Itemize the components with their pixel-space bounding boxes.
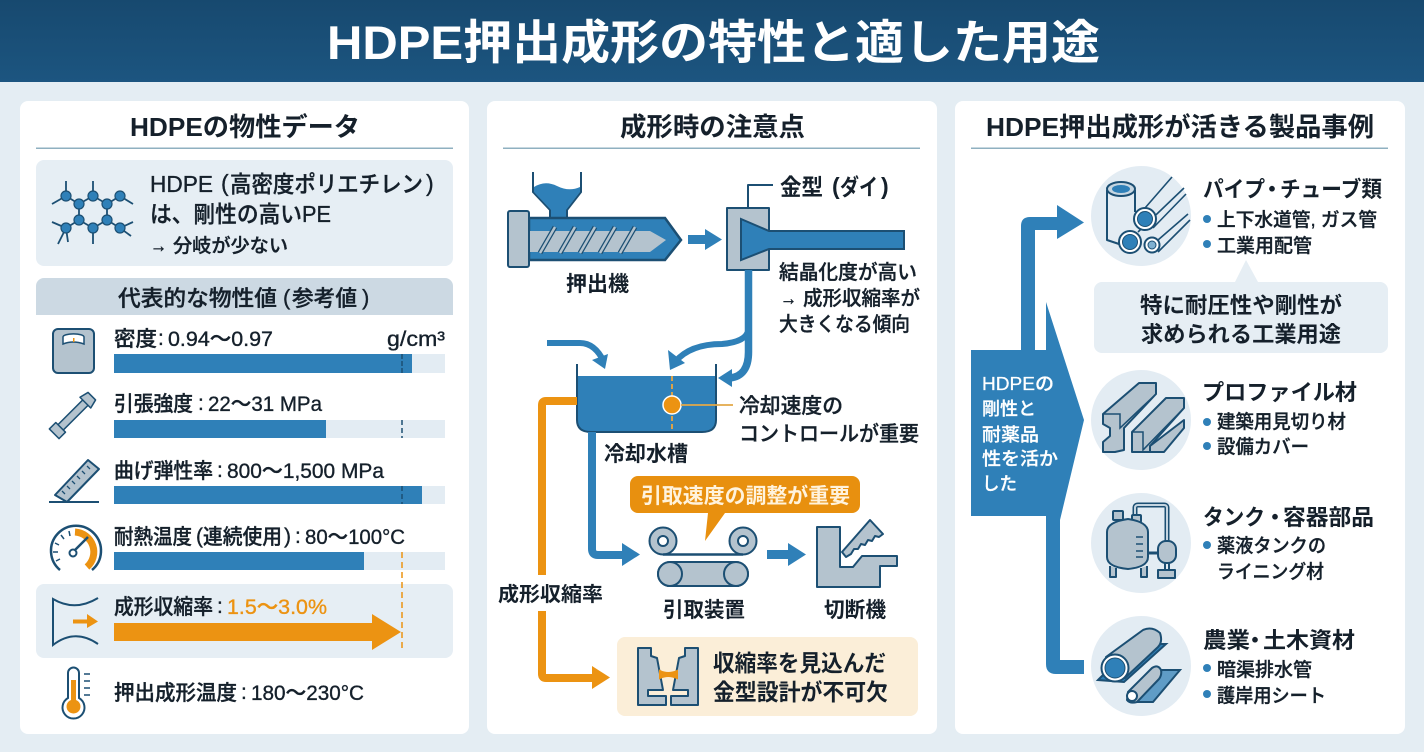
label: puller: 引取装置	[663, 599, 745, 622]
row: flexural modulus: 曲げ弾性率	[114, 460, 213, 483]
icon: rolls and sheet	[1098, 629, 1180, 703]
icon: scale	[53, 329, 94, 373]
heading: cautions: 成形時の注意点	[620, 112, 805, 142]
row: flexural modulus: :	[217, 459, 223, 482]
title: pipes	[1203, 177, 1382, 202]
heading: examples: HDPE押出成形が活きる製品事例	[986, 112, 1374, 142]
note: crystallinity: →	[780, 288, 797, 310]
row: tensile strength	[49, 391, 445, 439]
intro box	[36, 160, 453, 266]
icon: thermometer	[62, 668, 90, 719]
row: heat resistance: 耐熱温度	[114, 526, 192, 549]
label: cutter: 切断機	[824, 599, 886, 622]
label: cooling tank: 冷却水槽	[604, 443, 688, 466]
row: density	[53, 327, 445, 373]
callout: pull speed: 引取速度の調整が重要	[641, 484, 850, 508]
title: agricultural: 土木資材	[1263, 628, 1355, 653]
icon: shrinking part	[53, 598, 98, 645]
heading: properties: HDPEの物性データ	[130, 112, 360, 142]
row: density: g/cm³	[387, 328, 445, 351]
callout: industrial use	[1094, 260, 1388, 353]
icon: tank and pump	[1107, 505, 1176, 578]
icon: gauge	[51, 526, 101, 570]
row: extrusion temperature: :	[241, 681, 247, 704]
row: tensile strength: 引張強度	[114, 393, 193, 416]
intro text: →	[150, 236, 167, 257]
row: extrusion temperature: 押出成形温度	[114, 682, 237, 705]
note: cooling speed	[739, 395, 919, 446]
title banner: HDPE押出成形の特性と適した用途	[327, 16, 1100, 69]
icon: profiles	[1103, 383, 1184, 452]
row: heat resistance	[51, 525, 445, 570]
intro text: は、剛性の高いPE	[150, 201, 331, 227]
row: shrinkage highlighted: :	[217, 595, 223, 618]
label: die: )	[881, 173, 889, 199]
row: heat resistance: (	[196, 525, 203, 548]
row: heat resistance: 連続使用	[203, 526, 282, 549]
extruder	[508, 172, 681, 296]
label: branching text: した	[982, 474, 1017, 494]
label: die: (	[832, 173, 840, 199]
title: agricultural: ・	[1244, 628, 1266, 653]
example: profiles: プロファイル材	[1202, 380, 1357, 405]
example: profiles: 設備カバー	[1217, 436, 1309, 458]
icon: tensile specimen	[49, 391, 97, 439]
note: crystallinity: 成形収縮率が	[803, 287, 920, 310]
example: pipes: 上下水道管, ガス管	[1217, 209, 1377, 231]
row: heat resistance: :	[295, 525, 301, 548]
row: tensile strength: :	[198, 392, 204, 415]
row: shrinkage highlighted: 成形収縮率	[114, 596, 213, 619]
example: agricultural materials	[1091, 616, 1355, 716]
intro text: 分岐が少ない	[173, 235, 288, 257]
label: die: ダイ	[840, 174, 878, 200]
subheading: typical values: )	[362, 285, 369, 310]
example: profiles: 建築用見切り材	[1217, 411, 1346, 433]
row: density: 密度	[114, 328, 157, 351]
note: crystallinity: 大きくなる傾向	[779, 313, 910, 336]
row: extrusion temperature	[62, 668, 364, 719]
cutter	[817, 520, 897, 622]
panel: HDPE properties	[20, 101, 469, 734]
example: pipes: 工業用配管	[1217, 235, 1312, 257]
cooling tank	[577, 364, 733, 466]
label: die: 金型	[780, 174, 823, 200]
callout: mold design: 金型設計が不可欠	[713, 679, 888, 705]
title: tanks: タンク	[1203, 505, 1265, 530]
row: shrinkage highlighted	[36, 584, 453, 658]
example: agricultural materials: 暗渠排水管	[1217, 659, 1312, 681]
example: agricultural materials: 護岸用シート	[1217, 685, 1326, 707]
label: branching text: 性を活か	[982, 449, 1058, 469]
label: branching text: HDPEの	[982, 374, 1054, 394]
example: pipes	[1091, 166, 1382, 266]
label: die	[780, 173, 889, 200]
panel: molding cautions	[487, 101, 937, 734]
title: pipes: パイプ	[1203, 177, 1265, 202]
note: crystallinity	[779, 261, 920, 336]
intro text: )	[426, 170, 434, 196]
subheading: typical values: (	[283, 285, 291, 310]
row: flexural modulus	[49, 459, 445, 504]
arrows: flow to cooling tank	[547, 270, 748, 387]
note: cooling speed: 冷却速度の	[739, 395, 843, 418]
callout: industrial use: 求められる工業用途	[1141, 322, 1341, 347]
callout: mold design: 収縮率を見込んだ	[713, 650, 886, 676]
example: tanks: 薬液タンクの	[1217, 535, 1326, 557]
intro text: 高密度ポリエチレン	[230, 171, 423, 197]
label: shrinkage: 成形収縮率	[498, 582, 603, 606]
title: tanks	[1203, 505, 1374, 530]
intro text	[150, 170, 434, 257]
row: extrusion temperature: 180〜230°C	[251, 682, 364, 705]
icon: molecule	[52, 181, 133, 244]
label: branching text: 剛性と	[982, 399, 1036, 419]
callout: industrial use: 特に耐圧性や剛性が	[1140, 293, 1342, 318]
arrow: shrinkage range	[114, 614, 401, 650]
title: agricultural	[1203, 628, 1355, 653]
intro text: (	[221, 170, 229, 196]
row: flexural modulus: 800〜1,500 MPa	[227, 460, 384, 483]
title: pipes: ・	[1261, 177, 1283, 202]
title: tanks: 容器部品	[1283, 505, 1374, 530]
puller	[650, 528, 756, 622]
row: density: :	[158, 327, 164, 350]
title: pipes: チューブ類	[1280, 177, 1382, 202]
icon: pipes	[1107, 177, 1190, 253]
example: profiles	[1091, 370, 1357, 470]
row: heat resistance: )	[284, 525, 291, 548]
subheading: typical values: 代表的な物性値	[118, 286, 277, 311]
row: heat resistance: 80〜100°C	[305, 526, 405, 549]
callout: mold design	[617, 637, 918, 716]
icon: ruler	[49, 460, 99, 502]
arrow: shrinkage feedback	[498, 401, 610, 689]
icon: mold	[638, 648, 698, 705]
arrow: puller to cutter	[767, 543, 806, 566]
callout: pull speed	[630, 476, 860, 541]
label: branching text: 耐薬品	[982, 425, 1039, 445]
note: crystallinity: 結晶化度が高い	[779, 261, 917, 284]
arrow: extruder to die	[688, 229, 722, 250]
title: tanks: ・	[1264, 505, 1286, 530]
row: density: 0.94〜0.97	[168, 328, 273, 351]
subheading: typical values: 参考値	[292, 286, 357, 311]
row: tensile strength: 22〜31 MPa	[208, 393, 322, 416]
intro text: HDPE	[150, 171, 213, 197]
row: shrinkage highlighted: 1.5〜3.0%	[227, 596, 327, 619]
die	[727, 173, 904, 270]
label: extruder: 押出機	[566, 273, 629, 296]
branching arrow	[971, 205, 1084, 674]
label: branching text	[982, 374, 1058, 494]
title: agricultural: 農業	[1203, 628, 1250, 653]
example: tanks: ライニング材	[1217, 561, 1324, 583]
panel: product examples	[955, 101, 1405, 734]
example: tanks	[1091, 493, 1374, 593]
note: cooling speed: コントロールが重要	[739, 423, 919, 446]
arrow: tank to puller	[592, 432, 624, 555]
title banner	[0, 0, 1424, 82]
subheading: typical values	[36, 278, 453, 315]
